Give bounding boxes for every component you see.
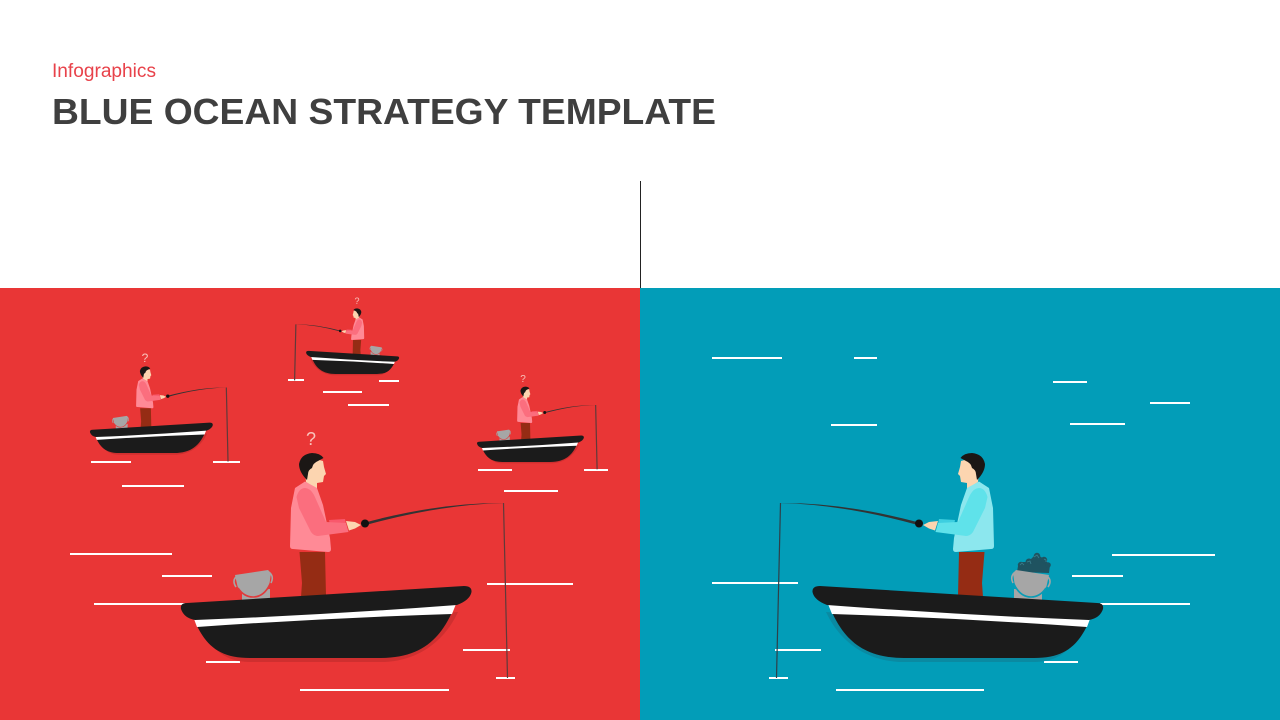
small fisherman boat: right — [477, 387, 597, 469]
fishing rod and line — [361, 503, 508, 678]
large fisherman boat: blue — [776, 453, 1103, 678]
title: BLUE OCEAN STRATEGY TEMPLATE — [52, 91, 716, 132]
boat — [181, 586, 472, 658]
fisherman — [290, 453, 361, 597]
panel: blue ocean — [640, 288, 1280, 720]
large fisherman boat: red — [181, 453, 508, 678]
centre divider — [640, 181, 642, 288]
question mark: left: ? — [142, 351, 149, 365]
water ripples: red — [70, 380, 608, 690]
water ripples: blue — [712, 358, 1215, 690]
bucket — [234, 570, 272, 601]
small fisherman boat: left — [90, 366, 228, 461]
small fisherman boat: top — [295, 308, 399, 380]
boat hull shadow — [201, 612, 458, 662]
question mark: top: ? — [354, 296, 360, 306]
subtitle: Infographics — [52, 61, 156, 82]
panel: red ocean — [0, 288, 640, 720]
question mark: large fisherman: ? — [306, 429, 316, 449]
fish in bucket — [1017, 553, 1051, 573]
question mark: right: ? — [520, 374, 526, 385]
